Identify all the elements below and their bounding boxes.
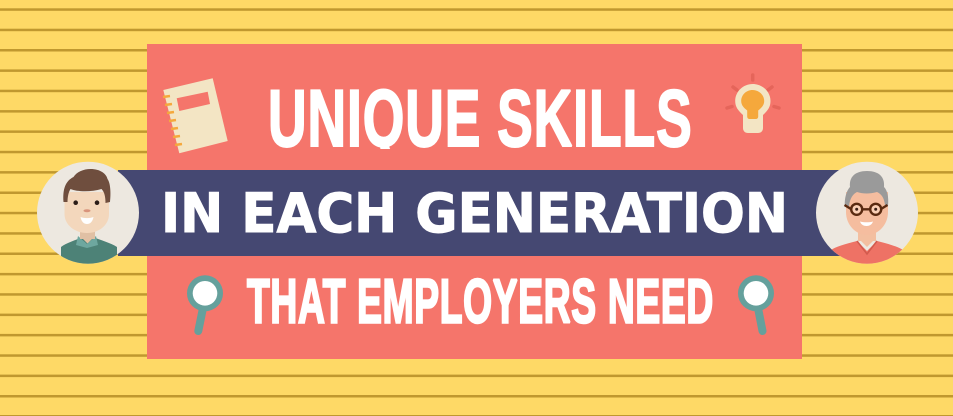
avatar: older woman: [816, 162, 918, 265]
banner: navy band: [118, 170, 840, 256]
heading: that employers need: THAT EMPLOYERS NEED: [247, 267, 713, 336]
icon: light bulb: [727, 75, 779, 133]
avatar: young man: [37, 162, 139, 265]
title: unique skills: UNIQUE SKILLS: [268, 73, 692, 164]
icon: notebook: [163, 78, 228, 153]
panel: coral title background: [147, 44, 802, 359]
icon: magnifier left: [187, 275, 223, 331]
icon: magnifier right: [738, 275, 774, 331]
heading: in each generation: IN EACH GENERATION: [161, 182, 788, 245]
